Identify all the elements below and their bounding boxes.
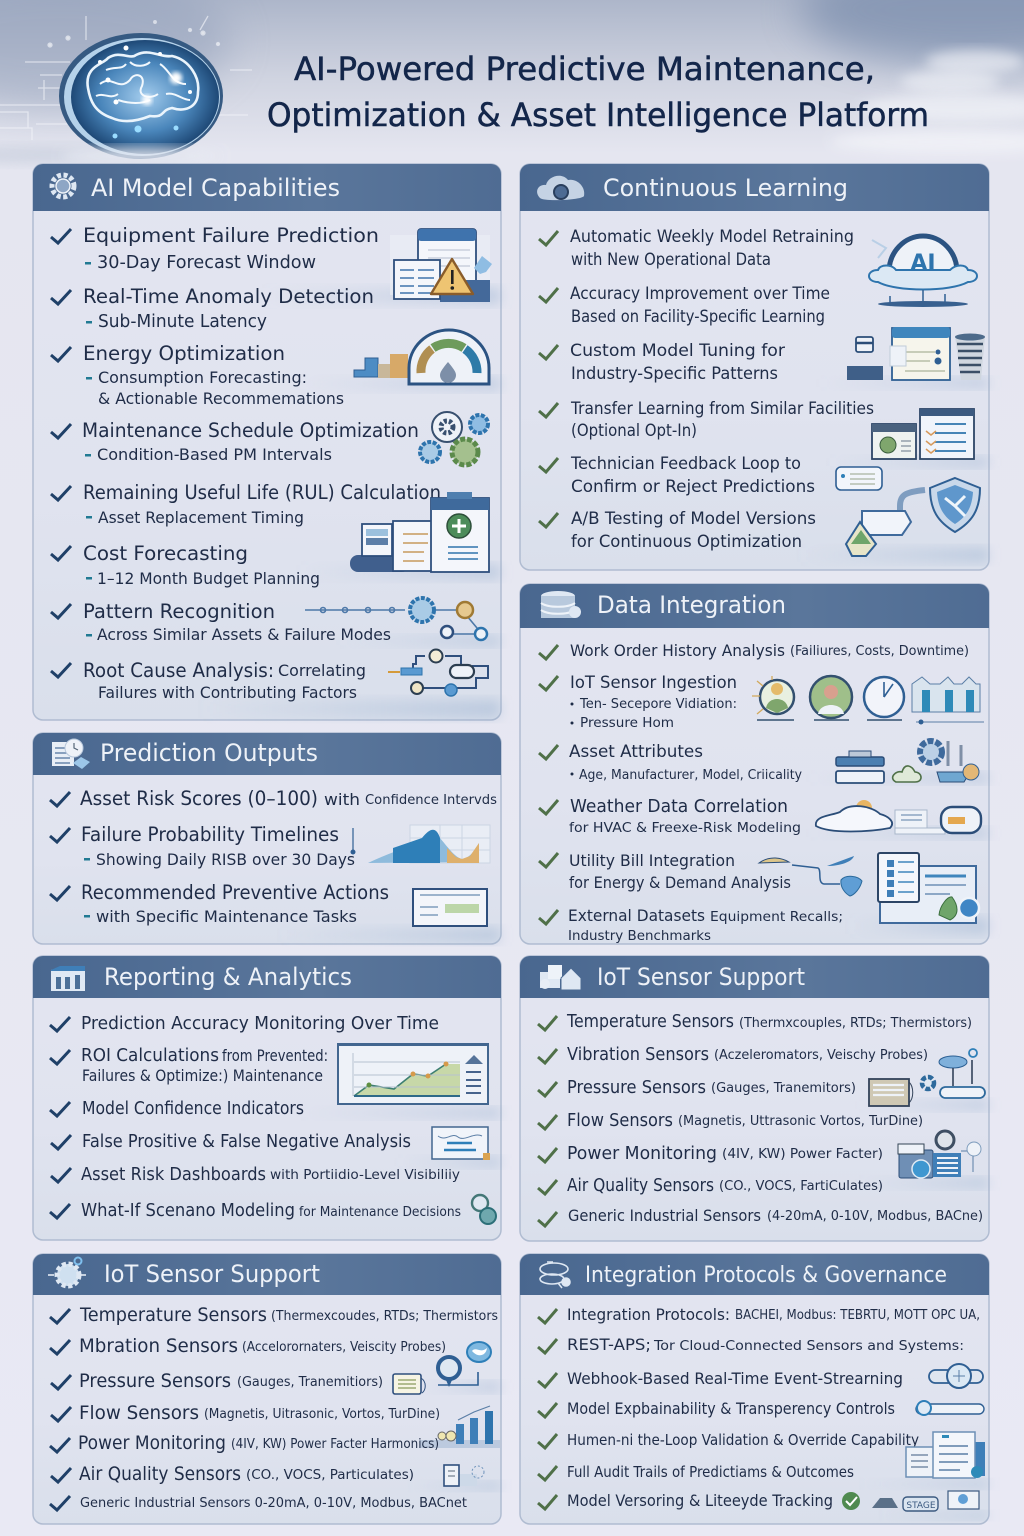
item: root cause analysis: Failures with Contributing Factors — [98, 683, 357, 702]
icon: message, shield and tag — [836, 467, 980, 556]
panel header — [520, 584, 989, 628]
item: generic industrial — [538, 1206, 983, 1226]
item: webhook: Webhook-Based Real-Time Event-Strearning — [567, 1369, 903, 1388]
item: accuracy improvement: Accuracy Improvement over Time — [570, 283, 830, 303]
item: asset attributes: Asset Attributes — [569, 741, 703, 761]
icon: report with clock and shield — [52, 739, 90, 769]
item: energy optimization — [51, 342, 344, 408]
item: what-if scenario: What-If Scenano Modeling — [81, 1201, 295, 1221]
icon: analytics building — [51, 966, 85, 991]
item: pressure: Pressure Sensors — [567, 1078, 706, 1098]
item: custom model tuning: Industry-Specific Patterns — [571, 363, 778, 383]
item: asset risk dashboards — [51, 1165, 460, 1185]
item: ROI calculations — [50, 1046, 328, 1085]
item: custom model tuning: Custom Model Tuning for — [570, 340, 785, 360]
icon: small dashboard — [432, 1127, 490, 1160]
item: A/B testing — [539, 508, 816, 551]
item: audit trails: Full Audit Trails of Predictiams & Outcomes — [567, 1463, 854, 1481]
item: vibration sensors: Mbration Sensors — [79, 1336, 238, 1357]
item: vibration: (Aczeleromators, Veischy Probes) — [714, 1047, 928, 1063]
icon: bar chart with bulbs — [438, 1406, 493, 1444]
icon: air quality device — [444, 1465, 484, 1486]
item: equipment failure prediction: 30-Day Forecast Window — [97, 253, 316, 273]
item: failure probability timelines: Showing Daily RISB over 30 Days — [96, 850, 355, 869]
item: flow: (Magnetis, Uttrasonic Vortos, TurDine) — [678, 1113, 923, 1129]
item: energy optimization: Energy Optimization — [83, 342, 285, 365]
item: energy optimization: Consumption Forecasting: — [98, 368, 307, 387]
panel header: Data Integration — [597, 591, 786, 619]
item: temperature — [538, 1012, 972, 1032]
icon: glowing AI brain globe — [59, 33, 223, 164]
item: asset risk dashboards: Asset Risk Dashboards — [81, 1165, 266, 1185]
item: real-time anomaly detection: Real-Time Anomaly Detection — [83, 285, 374, 308]
panel: Continuous Learning — [520, 164, 989, 570]
item: temperature: Temperature Sensors — [566, 1012, 734, 1032]
item: air quality: Air Quality Sensors — [567, 1176, 714, 1196]
item: weather data: for HVAC & Freexe-Risk Modeling — [569, 820, 801, 836]
item: equipment failure prediction — [51, 224, 379, 273]
panel: Data Integration — [520, 584, 989, 944]
item: what-if scenario — [50, 1201, 461, 1221]
item: root cause analysis: Correlating — [278, 661, 366, 680]
item: ROI calculations: ROI Calculations — [81, 1046, 219, 1066]
icon: line chart window — [338, 1043, 488, 1104]
item: asset risk scores — [50, 787, 497, 810]
item: REST APIs: REST-APS; — [567, 1335, 651, 1354]
item: external datasets: Equipment Recalls; — [710, 909, 843, 925]
item: air quality sensors: (CO., VOCS, Particulates) — [246, 1467, 414, 1483]
item: pressure sensors: (Gauges, Tranemitiors) — [237, 1374, 383, 1390]
item: technician feedback: Technician Feedback Loop to — [570, 453, 801, 473]
item: asset attributes: Age, Manufacturer, Model, Criicality — [579, 767, 802, 783]
icon: pattern network — [305, 598, 487, 640]
item: cost forecasting: 1–12 Month Budget Planning — [97, 569, 320, 588]
item: integration protocols: BACHEI, Modbus: TEBRTU, MOTT OPC UA, — [735, 1307, 980, 1323]
item: pressure: (Gauges, Tranemitors) — [711, 1080, 856, 1096]
item: IoT sensor ingestion — [539, 672, 737, 731]
item: accuracy improvement: Based on Facility-Specific Learning — [571, 306, 825, 326]
item: technician feedback — [539, 453, 815, 496]
item: pressure — [538, 1078, 856, 1098]
item: cost forecasting — [51, 542, 320, 588]
item: remaining useful life: Remaining Useful Life (RUL) Calculation — [83, 481, 441, 504]
item: generic industrial sensors: Generic Industrial Sensors 0-20mA, 0-10V, Modbus, BACnet — [80, 1495, 467, 1511]
icon: gears — [420, 412, 488, 465]
item: REST APIs — [538, 1335, 964, 1354]
item: air quality: (CO., VOCS, FartiCulates) — [719, 1178, 883, 1194]
icon: asset device and report — [350, 492, 489, 572]
icon: root cause flow — [388, 650, 488, 696]
item: power monitoring: (4IV, KW) Power Facter Harmonics) — [231, 1436, 439, 1452]
item: weather data — [539, 797, 801, 836]
item: A/B testing: A/B Testing of Model Versions — [571, 508, 816, 528]
item: remaining useful life — [51, 481, 441, 527]
panel header — [33, 956, 501, 998]
item: real-time anomaly detection — [51, 285, 374, 332]
item: what-if scenario: for Maintenance Decisions — [299, 1204, 461, 1220]
item: asset attributes — [539, 741, 802, 783]
icon: warning dashboard — [390, 229, 492, 302]
item: transfer learning: Transfer Learning from Similar Facilities — [570, 398, 874, 418]
item: automatic weekly retraining: with New Operational Data — [571, 249, 771, 269]
icon: task window — [413, 889, 487, 926]
panel header: Continuous Learning — [603, 174, 848, 202]
icon: sensor boxes — [540, 965, 581, 990]
item: maintenance schedule optimization — [51, 419, 419, 464]
title: Optimization & Asset Intelligence Platform — [267, 96, 929, 134]
icon: gear — [52, 175, 74, 197]
item: ROI calculations: Failures & Optimize:) Maintenance — [82, 1066, 323, 1085]
item: IoT sensor ingestion: Pressure Hom — [580, 715, 674, 731]
item: work order: Work Order History Analysis — [570, 641, 785, 660]
item: vibration — [538, 1045, 928, 1065]
item: maintenance schedule optimization: Condition-Based PM Intervals — [97, 445, 332, 464]
item: cost forecasting: Cost Forecasting — [83, 542, 248, 565]
panel: Integration Protocols & Governance — [520, 1254, 989, 1524]
icon: database — [541, 591, 581, 618]
item: ROI calculations: from Prevented: — [222, 1046, 328, 1065]
item: integration protocols: Integration Protocols: — [567, 1305, 730, 1324]
item: power monitoring: Power Monitoring — [567, 1144, 717, 1164]
icon: cloud with gears — [537, 176, 584, 200]
item: technician feedback: Confirm or Reject Predictions — [571, 476, 815, 496]
icon: governance network — [540, 1262, 570, 1288]
item: IoT sensor ingestion: IoT Sensor Ingestion — [570, 672, 737, 692]
item: temperature sensors: Temperature Sensors — [79, 1305, 267, 1326]
item: temperature sensors — [50, 1305, 498, 1326]
item: temperature sensors: (Thermexcoudes, RTDs; Thermistors — [271, 1308, 498, 1324]
item: maintenance schedule optimization: Maintenance Schedule Optimization — [82, 419, 419, 442]
item: pattern recognition — [51, 600, 391, 644]
icon: report and database — [847, 327, 985, 380]
panel header — [33, 164, 501, 211]
item: remaining useful life: Asset Replacement Timing — [98, 508, 304, 527]
item: pressure sensors: Pressure Sensors — [79, 1371, 231, 1392]
item: recommended preventive actions: with Specific Maintenance Tasks — [96, 907, 357, 926]
item: equipment failure prediction: Equipment Failure Prediction — [83, 224, 379, 247]
icon: sensor icon row — [752, 676, 984, 724]
panel header: Integration Protocols & Governance — [585, 1263, 947, 1288]
icon: sensor pins — [438, 1342, 491, 1387]
item: flow sensors — [51, 1403, 440, 1424]
panel header — [520, 164, 989, 211]
icon: clipboard — [393, 1374, 425, 1394]
item: air quality sensors: Air Quality Sensors — [79, 1464, 241, 1485]
panel: Reporting & Analytics — [33, 956, 501, 1240]
panel: AI Model Capabilities — [33, 164, 501, 720]
icon: weather cloud and forecast — [816, 800, 981, 834]
item: power monitoring: Power Monitoring — [78, 1433, 226, 1454]
item: asset risk scores: with — [324, 790, 360, 809]
item: utility bill — [539, 851, 791, 892]
item: external datasets: Industry Benchmarks — [568, 928, 711, 944]
item: power monitoring — [50, 1433, 439, 1454]
panel header — [33, 1254, 501, 1295]
item: automatic weekly retraining: Automatic Weekly Model Retraining — [570, 226, 854, 246]
panel header — [520, 956, 989, 998]
item: false positive: False Prositive & False Negative Analysis — [82, 1132, 411, 1152]
panel header — [33, 733, 501, 775]
item: power monitoring: (4IV, KW) Power Facter) — [722, 1146, 883, 1162]
item: explainability: Model Expbainability & Transperency Controls — [567, 1399, 895, 1418]
icon: energy gauge and bars — [354, 330, 489, 384]
item: A/B testing: for Continuous Optimization — [571, 531, 802, 551]
item: pressure sensors — [51, 1371, 383, 1392]
panel header: AI Model Capabilities — [91, 174, 340, 202]
item: human-in-the-loop: Humen-ni the-Loop Validation & Override Capability — [567, 1431, 919, 1449]
item: power monitoring — [538, 1144, 883, 1164]
item: pattern recognition: Across Similar Assets & Failure Modes — [97, 625, 391, 644]
item: utility bill: for Energy & Demand Analysis — [569, 873, 791, 892]
item: transfer learning — [539, 398, 874, 440]
item: generic industrial: (4-20mA, 0-10V, Modbus, BACne) — [767, 1208, 983, 1224]
item: model versioning: Model Versoring & Liteeyde Tracking — [567, 1491, 833, 1510]
icon: versioning badges: STAGE — [906, 1501, 936, 1511]
icon: industrial machine — [898, 1131, 981, 1178]
item: flow sensors: Flow Sensors — [79, 1403, 199, 1424]
panel header: IoT Sensor Support — [597, 963, 805, 991]
item: energy optimization: & Actionable Recommemations — [98, 389, 344, 408]
icon: magnifier — [472, 1195, 496, 1224]
item: real-time anomaly detection: Sub-Minute Latency — [98, 312, 267, 332]
item: failure probability timelines — [50, 823, 355, 869]
item: air quality sensors — [51, 1464, 414, 1485]
item: vibration sensors — [50, 1336, 446, 1357]
item: asset risk dashboards: with Portiidio-Level Visibiliiy — [270, 1167, 460, 1183]
item: vibration sensors: (Accelorornaters, Veiscity Probes) — [242, 1339, 446, 1355]
title — [267, 50, 929, 134]
icon: box gear and router — [869, 1049, 985, 1106]
item: generic industrial: Generic Industrial Sensors — [568, 1206, 761, 1225]
panel: IoT Sensor Support (right) — [520, 956, 989, 1241]
panel: Prediction Outputs — [33, 733, 501, 944]
icon: AI cloud: AI — [910, 251, 936, 276]
item: recommended preventive actions: Recommended Preventive Actions — [81, 881, 389, 904]
item: failure probability timelines: Failure Probability Timelines — [81, 823, 339, 846]
panel header — [520, 1254, 989, 1295]
item: root cause analysis — [51, 659, 366, 702]
icon: layered windows — [872, 409, 974, 459]
icon: probability chart — [350, 825, 490, 863]
item: automatic weekly retraining — [539, 226, 854, 269]
item: IoT sensor ingestion: Ten- Secepore Vidiation: — [579, 696, 737, 712]
item: recommended preventive actions — [50, 881, 389, 926]
icon: versioning badges — [842, 1491, 979, 1511]
item: custom model tuning — [539, 340, 785, 383]
item: work order — [539, 641, 969, 660]
item: vibration: Vibration Sensors — [567, 1045, 709, 1065]
item: air quality — [538, 1176, 883, 1196]
item: flow: Flow Sensors — [567, 1111, 673, 1131]
item: integration protocols — [538, 1305, 980, 1324]
item: root cause analysis: Root Cause Analysis: — [83, 659, 274, 682]
panel header: Reporting & Analytics — [104, 963, 352, 991]
icon: utility bill network and report — [759, 853, 979, 923]
icon: transparency slider — [916, 1401, 984, 1415]
item: temperature: (Thermxcouples, RTDs; Thermistors) — [739, 1015, 972, 1031]
panel: IoT Sensor Support (left) — [33, 1254, 501, 1524]
item: REST APIs: Tor Cloud-Connected Sensors and Systems: — [653, 1338, 964, 1354]
panel header: Prediction Outputs — [100, 739, 318, 767]
item: work order: (Failiures, Costs, Downtime) — [790, 643, 969, 659]
item: flow — [538, 1111, 923, 1131]
item: model confidence: Model Confidence Indicators — [82, 1099, 304, 1119]
circuit decoration — [0, 16, 252, 140]
icon: webhook clock — [929, 1364, 983, 1388]
item: transfer learning: (Optional Opt-In) — [571, 420, 697, 440]
panel header: IoT Sensor Support — [104, 1260, 320, 1288]
icon: stack and gear — [836, 741, 979, 783]
item: external datasets — [539, 906, 843, 944]
title: AI-Powered Predictive Maintenance, — [294, 50, 875, 88]
item: flow sensors: (Magnetis, Uitrasonic, Vortos, TurDine) — [204, 1406, 440, 1422]
item: external datasets: External Datasets — [568, 906, 705, 925]
item: accuracy improvement — [539, 283, 830, 326]
item: asset risk scores: Confidence Intervds — [365, 792, 497, 808]
item: asset risk scores: Asset Risk Scores (0–100) — [80, 787, 318, 810]
item: pattern recognition: Pattern Recognition — [83, 600, 275, 623]
icon: shield gear — [48, 1258, 86, 1286]
icon: AI cloud — [869, 236, 977, 307]
item: prediction accuracy: Prediction Accuracy Monitoring Over Time — [81, 1014, 439, 1034]
item: utility bill: Utility Bill Integration — [569, 851, 735, 870]
icon: documents — [906, 1432, 985, 1478]
item: weather data: Weather Data Correlation — [570, 797, 788, 817]
